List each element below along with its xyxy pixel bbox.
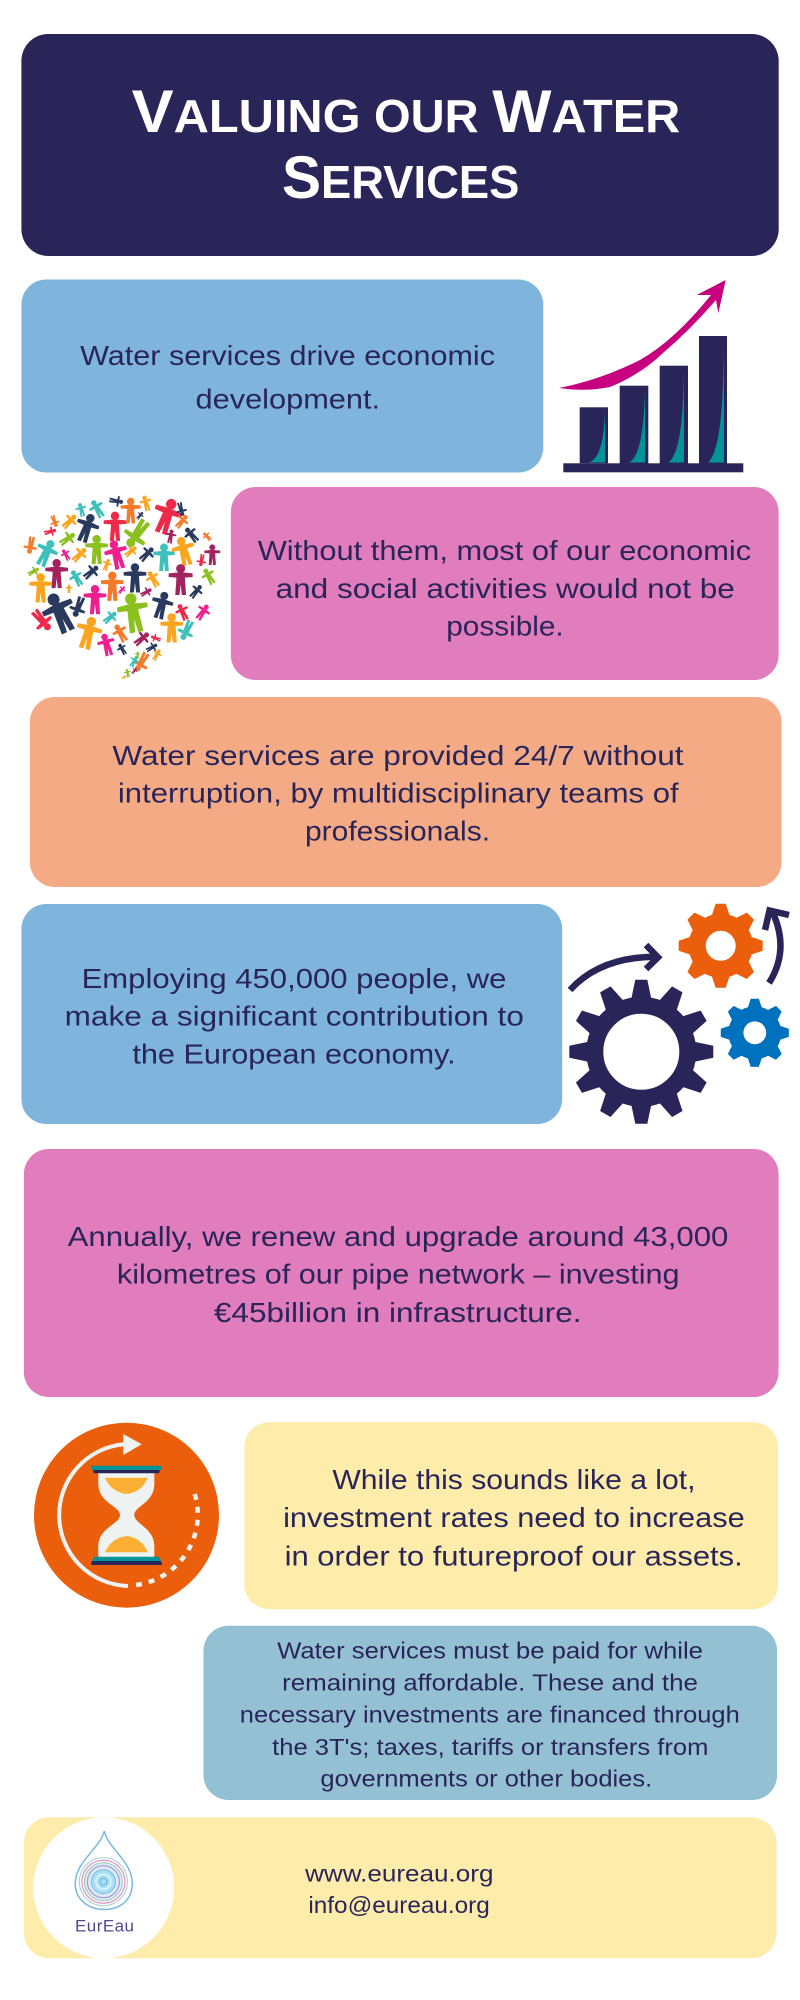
text: 24/7 service: Water services are provided 24/7 without [112,740,684,771]
text: contact details [304,1860,494,1918]
icon: orange gear [679,904,763,988]
panel: social activities [231,487,779,680]
text: social activities: and social activities would not be [276,573,735,604]
panel: economic development [21,280,543,472]
panel: 24/7 service [30,697,782,887]
text: economic development [80,340,495,415]
icon: gears and arrows [569,904,789,1124]
panel: investment figures [24,1149,779,1397]
text: employment: the European economy. [132,1038,456,1070]
title: OUR [374,90,479,142]
text: financing [240,1637,740,1792]
text: economic development: development. [196,383,380,415]
text: investment figures: Annually, we renew and upgrade around 43,000 [68,1221,728,1252]
text: employment: make a significant contribution to [65,1000,524,1032]
icon: large navy gear [569,980,713,1124]
logo: EurEau [33,1817,174,1958]
text: investment figures: €45billion in infrastructure. [214,1297,582,1328]
arrow: navy curved upward [765,910,789,983]
panel: investment rates [244,1422,778,1609]
text: investment rates: in order to futureproof our assets. [285,1540,743,1571]
text: investment rates [283,1464,745,1571]
icon: rising bar chart [559,280,743,472]
text: 24/7 service [112,740,684,847]
title banner [21,34,779,256]
text: contact details: info@eureau.org [308,1892,490,1918]
title [132,78,680,211]
text: employment: Employing 450,000 people, we [82,963,506,994]
panel: financing [203,1626,777,1800]
title: SERVICES [282,144,519,211]
text: investment rates: investment rates need to increase [283,1502,745,1533]
panel: employment [21,904,562,1124]
title: WATER [492,78,680,145]
text: 24/7 service: professionals. [305,815,490,847]
panel: contact footer [24,1817,776,1958]
text: financing: remaining affordable. These and the [282,1669,698,1696]
text: investment figures: kilometres of our pipe network – investing [117,1258,680,1290]
text: social activities: possible. [446,610,564,642]
icon: blue gear [721,999,789,1067]
text: social activities [258,535,751,642]
text: investment figures [68,1221,728,1328]
icon: magenta growth arrow [559,280,726,390]
text: 24/7 service: interruption, by multidisciplinary teams of [118,777,679,809]
text: financing: governments or other bodies. [320,1765,652,1792]
title: VALUING [132,78,361,145]
logo: EurEau: EurEau [75,1917,134,1936]
text: economic development: Water services drive economic [80,340,495,371]
text: contact details: www.eureau.org [304,1860,494,1886]
text: financing: the 3T's; taxes, tariffs or transfers from [272,1734,708,1760]
text: social activities: Without them, most of our economic [258,535,751,566]
icon: hourglass in orange circle [34,1423,219,1608]
text: investment rates: While this sounds like a lot, [332,1464,696,1495]
illustration: speech bubble of people [23,494,220,680]
arrow: navy curved to orange gear [570,945,658,990]
text: financing: necessary investments are financed through [240,1702,740,1728]
text: employment [65,963,524,1070]
text: financing: Water services must be paid for while [277,1637,703,1663]
